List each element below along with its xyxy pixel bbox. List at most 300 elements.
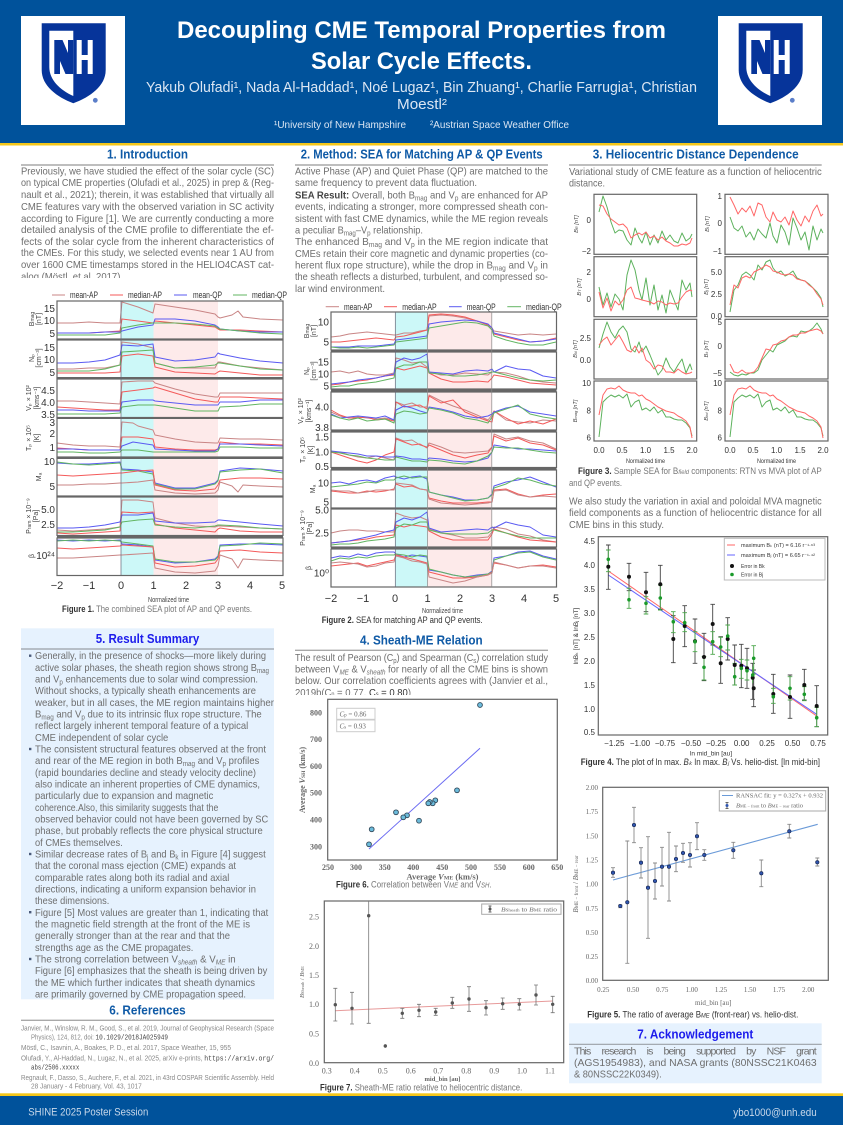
y tick labels: 10	[318, 318, 329, 328]
panel: Vp	[331, 392, 556, 430]
y tick labels: 5	[718, 318, 723, 327]
y axis labels: Bmag [nT]	[573, 399, 579, 422]
y tick labels: 6	[587, 434, 592, 442]
text: result bullets: of CMEs themselves.	[35, 837, 123, 849]
panel: BN	[594, 319, 697, 379]
panel: references	[21, 1002, 274, 1090]
axis ticks	[584, 537, 826, 748]
x tick labels: 5	[279, 580, 285, 592]
axis ticks: 1.0	[309, 1000, 319, 1009]
figure 2: SEA for matching events	[298, 302, 562, 625]
axis ticks: 0.5	[584, 728, 596, 737]
text: introduction: over 1600 CME timestamps stored in the HELIO4CAST cat-	[21, 259, 274, 271]
y axis labels	[573, 215, 711, 422]
panel: Bmag	[331, 312, 556, 350]
logo left	[21, 16, 125, 125]
text: result bullets: observed behavior could not have been governed by SC	[35, 814, 269, 826]
text: method: and V	[382, 236, 411, 248]
y tick labels: 4.5	[41, 386, 55, 397]
legend: Error in Bj	[741, 572, 763, 578]
y axis labels: BT [nT]	[577, 278, 583, 296]
text: method: herent flux rope structure), while the drop in B	[295, 260, 507, 272]
axis ticks: 2.00	[802, 986, 815, 994]
panel: Bj	[725, 257, 828, 317]
text: introduction: Previously, we have studied the effect of the solar cycle (SC)	[21, 166, 274, 178]
text: method: p	[534, 266, 538, 272]
y tick labels: 10	[44, 457, 55, 468]
y axis labels: [cm⁻³]	[36, 348, 43, 368]
x axis label: Normalized time	[422, 606, 463, 615]
text: sheath-ME relation: p	[393, 658, 397, 665]
title: Decoupling CME Temporal Properties from	[177, 17, 666, 44]
text: reference list: abs/2506.xxxxx	[31, 1064, 80, 1072]
figure 4: ln max field vs distance: ln mid_bin [au]	[690, 750, 732, 758]
axis ticks: 250	[322, 863, 334, 872]
y tick labels: 4.0	[315, 402, 329, 414]
y tick labels: −1	[713, 247, 723, 256]
y axis labels: Bmag	[29, 312, 36, 326]
y tick labels: 0	[718, 219, 723, 228]
text: introduction: CME features vary with the observed variation in SC activity	[21, 201, 275, 213]
y axis labels: [Pa]	[33, 510, 40, 522]
x tick labels: 0	[118, 580, 124, 592]
legend: mean-QP	[467, 302, 496, 312]
affiliations: ¹University of New Hampshire	[274, 119, 406, 131]
axis ticks: 0.75	[586, 905, 598, 913]
text: reference list	[21, 1024, 274, 1090]
axis ticks: 1.5	[309, 971, 319, 980]
axis ticks: 1.0	[584, 705, 596, 714]
text: introduction: fects of the solar cycle from the inherent characteristics of	[21, 236, 274, 248]
text: result bullets: the ME which further indicates that sheath dynamics	[35, 977, 255, 989]
text: result bullets: j	[146, 854, 149, 862]
panel: heliocentric distance dependence	[569, 146, 822, 190]
text: introduction: detailed analysis of the CME profile to differentiate the ef-	[21, 224, 274, 236]
panel: Bmag right	[725, 381, 828, 441]
text: acknowledgement: This research is being supported by NSF grant	[574, 1046, 817, 1058]
title: Solar Cycle Effects.	[311, 48, 532, 75]
axis ticks: 1.00	[686, 986, 698, 994]
caption: figure 3: Figure 3. Sample SEA for Bfield components: RTN vs MVA plot of AP	[578, 466, 822, 476]
legend	[724, 538, 825, 580]
axis ticks: 1.75	[586, 808, 598, 816]
figure 7: sheath-ME ratio: mid_bin [au]	[424, 1076, 460, 1083]
axis ticks: 0.50	[586, 929, 598, 937]
axis ticks: 0.8	[461, 1066, 471, 1076]
text: reference list: Physics), 124, 812, doi: 10.1029/2018JA025949	[31, 1032, 168, 1042]
y axis labels: Pram × 10⁻⁹	[26, 498, 33, 534]
panel: Pram	[331, 509, 556, 547]
y tick labels: 3.8	[315, 423, 329, 434]
heading: heliocentric distance: 3. Heliocentric Distance Dependence	[593, 146, 799, 162]
heading: acknowledgement: 7. Acknowledgement	[637, 1026, 754, 1042]
y tick labels: 10⁰	[314, 568, 329, 580]
heading: introduction: 1. Introduction	[107, 146, 188, 162]
y tick labels: 3.5	[41, 410, 55, 421]
axis ticks: 2.0	[309, 942, 319, 951]
y tick labels: 5	[323, 498, 329, 508]
axis ticks: 700	[310, 735, 322, 744]
axis ticks: 3.5	[584, 585, 596, 594]
text: method: relationship.	[371, 224, 423, 236]
y tick labels: 5	[323, 338, 329, 348]
text: method: The enhanced B	[295, 236, 372, 248]
legend	[337, 708, 375, 732]
text: result bullets: and V	[35, 674, 62, 686]
legend: median-AP	[128, 290, 162, 300]
axis ticks: −1.00	[630, 739, 651, 748]
panel: BR	[594, 194, 697, 254]
text: result bullets: these dimensions.	[35, 895, 109, 907]
panel: method	[295, 146, 548, 295]
y tick labels: 5.0	[315, 506, 329, 516]
y tick labels: 0.5	[315, 462, 329, 473]
text: sheath-ME relation: & V	[349, 664, 367, 676]
legend: BSheath to BME ratio	[501, 906, 557, 914]
text: result bullets: particularly due to expansion and magnetic	[35, 790, 213, 802]
text: result bullets: strengths age as the CME propagates.	[35, 942, 193, 954]
axis ticks: 300	[310, 842, 322, 852]
y axis labels: [nT]	[311, 325, 318, 337]
fit line	[369, 748, 480, 849]
y axis labels: [kms⁻¹]	[34, 387, 41, 409]
x tick labels	[325, 593, 559, 605]
axis ticks: 1.25	[586, 856, 598, 864]
axis ticks: 1.50	[586, 832, 598, 840]
text: result bullets: active solar phases, the sheath region shows strong B	[35, 662, 287, 674]
y axis labels: Btot [nT]	[704, 401, 710, 421]
text: acknowledgement: & 80NSSC22K0349).	[574, 1068, 662, 1080]
x tick labels: 0.5	[616, 446, 628, 455]
y axis labels	[26, 312, 43, 558]
text: result bullets: reflect largely inherent temporal feature of a typical	[35, 720, 248, 732]
x axis label: Normalized time	[148, 595, 189, 604]
text: method: and V	[427, 190, 455, 202]
axis ticks: 350	[379, 863, 391, 872]
caption: figure 6: Figure 6. Correlation between VME and VSH.	[336, 880, 492, 890]
text: result bullets: profiles	[226, 755, 259, 767]
x tick labels: 1.0	[771, 446, 783, 455]
axis ticks: 2.0	[584, 657, 596, 666]
figure 5: ME front to rear ratio: mid_bin [au]	[695, 999, 731, 1007]
y axis labels: β	[306, 566, 313, 570]
axis ticks: 0.00	[734, 739, 750, 748]
fit line	[335, 1001, 553, 1011]
axis ticks: 600	[310, 762, 322, 771]
caption: figure 3	[569, 466, 822, 488]
text: method: and V	[506, 260, 534, 272]
legend: RANSAC fit: y = 0.327x + 0.932	[736, 792, 823, 800]
text: reference list: 28 January - 4 February, Vol. 43, 1017	[31, 1081, 142, 1090]
panel: MA	[331, 470, 556, 508]
x tick labels: 2	[457, 593, 463, 605]
y axis labels: Tₚ × 10⁵	[26, 425, 33, 451]
caption: figure 1: Figure 1. The combined SEA plot of AP and QP events.	[62, 604, 252, 614]
axis ticks: −0.50	[681, 739, 702, 748]
error bars	[611, 807, 819, 963]
axis ticks: 2.00	[586, 784, 598, 792]
y tick labels	[314, 318, 329, 580]
y axis labels: Nₚ	[29, 354, 36, 362]
panel: Bmag left	[594, 381, 697, 441]
text: method: mag	[369, 242, 382, 249]
text: sheath-ME relation: ME	[339, 670, 349, 676]
axis ticks: 0.5	[378, 1066, 388, 1076]
text: method: a peculiar B	[295, 224, 350, 236]
y axis labels: Tₚ × 10⁵	[300, 437, 307, 463]
text: reference list: Regnault, F., Dasso, S., Auchere, F., et al. 2021, in 43rd COSPAR Scientific Assembly. Held	[21, 1073, 274, 1082]
text: method: mag	[344, 230, 356, 238]
text: result bullets: mag	[41, 714, 54, 722]
y tick labels: 5.0	[41, 505, 55, 516]
panel: Bk	[725, 319, 828, 379]
y tick labels: 0	[587, 216, 592, 225]
text: result bullets: in	[225, 954, 236, 966]
text: result bullets: Similar decrease rates of B	[35, 848, 161, 860]
axis ticks: 600	[523, 863, 535, 872]
y axis labels: Mₐ	[310, 484, 317, 493]
text: acknowledgement	[574, 1046, 817, 1080]
axis ticks: 4.5	[584, 537, 596, 546]
axis ticks: 0.50	[785, 739, 801, 748]
y axis labels: BN [nT]	[573, 340, 579, 358]
caption: figure 7: Figure 7. Sheath-ME ratio relative to heliocentric distance.	[320, 1082, 522, 1092]
y tick labels: 1	[718, 192, 723, 201]
panel: result summary	[21, 628, 274, 1000]
legend: Cs = 0.93	[340, 722, 366, 730]
text: method: lar wind environment.	[295, 283, 385, 295]
y axis labels	[298, 324, 318, 570]
figure 4: ln max field vs distance	[573, 537, 828, 767]
heading: sheath-ME relation: 4. Sheath-ME Relation	[360, 632, 483, 648]
axis ticks	[586, 784, 815, 994]
figure 7: sheath-ME ratio	[299, 901, 564, 1092]
y tick labels: 15	[318, 358, 329, 368]
text: method: p	[455, 196, 459, 202]
y axis labels: Vₚ × 10²	[26, 384, 33, 411]
text: method: mag	[415, 196, 427, 202]
legend: maximum Bₖ (nT) = 6.16 r⁻¹·⁶³	[741, 543, 815, 549]
axis ticks: 1.50	[744, 986, 757, 994]
text: result bullets: also indicate an inherent properties of CME dynamics,	[35, 778, 260, 790]
y tick labels: 4.0	[41, 398, 55, 409]
caption: figure 4: Figure 4. The plot of ln max. Bₖ ln max. Bⱼ Vs. helio-dist. [ln mid-bin]	[581, 757, 820, 767]
data points: black	[606, 565, 819, 708]
footer: email: ybo1000@unh.edu	[733, 1107, 817, 1119]
x tick labels: 5	[553, 593, 559, 605]
axis ticks: 550	[494, 863, 506, 872]
fit lines	[608, 571, 817, 716]
x tick labels: 0.5	[747, 446, 759, 455]
axis ticks: 1.1	[545, 1066, 555, 1076]
text: method: events, indicating a stronger, more compressed sheath con-	[295, 201, 548, 213]
axis ticks: 0.3	[322, 1066, 332, 1076]
y tick labels: 10	[318, 370, 329, 380]
text: result bullets: ME	[216, 960, 226, 966]
logo right	[718, 16, 822, 125]
text: result bullets: Figure [6] emphasizes that the sheath is being driven by	[35, 965, 268, 977]
axis ticks: 0.50	[627, 986, 640, 994]
title	[177, 17, 666, 75]
legend: median-AP	[402, 302, 437, 312]
footer	[0, 1093, 843, 1125]
legend: mean-AP	[70, 290, 98, 300]
axis ticks: 2.5	[584, 633, 596, 642]
text: reference list: Olufadi, Y., Al-Haddad, N., Lugaz, N., et al. 2025, arXiv e-prints, https://arxiv.org/	[21, 1054, 274, 1064]
axis ticks: 1.25	[715, 986, 728, 994]
affiliations	[274, 119, 569, 131]
y axis labels: β	[29, 554, 36, 558]
x tick labels: 0.0	[724, 446, 736, 455]
text: method: –V	[356, 224, 367, 236]
y tick labels: 10	[44, 316, 55, 327]
text: method	[295, 166, 548, 295]
axis ticks: 800	[310, 708, 322, 718]
authors: Moestl²	[397, 97, 447, 113]
y tick labels: 1.5	[315, 432, 329, 444]
text: result bullets: generally stronger than at the rear and that the	[35, 930, 230, 942]
scatter points	[367, 703, 482, 847]
heading: method: 2. Method: SEA for Matching AP & QP Events	[301, 146, 543, 162]
text: heliocentric intro: Variational study of CME feature as a function of heliocentric	[569, 166, 822, 178]
axis ticks: 400	[407, 863, 419, 872]
text: result bullets: and B	[148, 848, 175, 860]
panel: sheath-ME relation	[290, 632, 550, 700]
y tick labels: 2.5	[315, 528, 329, 540]
y tick labels: 5.0	[711, 268, 723, 277]
axis ticks: 0.0	[309, 1059, 319, 1068]
y tick labels: 2.5	[41, 520, 55, 531]
text: method: in	[538, 260, 548, 272]
x tick labels: 3	[215, 580, 221, 592]
text: heliocentric intro	[569, 166, 822, 190]
y tick labels: 2	[49, 429, 55, 440]
footer: session: SHINE 2025 Poster Session	[28, 1106, 148, 1118]
y axis labels: Vₚ × 10²	[298, 397, 305, 424]
text: method: p	[367, 230, 371, 238]
y axis labels: [Pa]	[307, 522, 314, 534]
text: result bullets: comparable rates along both its radial and axial	[35, 872, 229, 884]
caption: figure 2: Figure 2. SEA for matching AP and QP events.	[322, 615, 483, 625]
panel: Tp	[57, 418, 283, 457]
axis ticks: 0.25	[597, 986, 610, 994]
text: sheath-ME relation: s	[473, 658, 477, 665]
legend	[326, 302, 562, 312]
legend: Error in Bk	[741, 564, 765, 570]
text: introduction: on typical CME properties (Olufadi et al., 2025) in prep & (Reg-	[21, 177, 274, 189]
axis ticks: 300	[350, 863, 362, 872]
legend	[719, 791, 826, 811]
text: result bullets: Generally, in the presence of shocks—more likely during	[35, 650, 266, 662]
axis ticks: 0.00	[586, 977, 598, 985]
y axis labels: Bl [nT]	[705, 216, 711, 232]
panel: introduction	[15, 146, 280, 286]
figure 5: ME front to rear ratio	[572, 784, 828, 1020]
x tick labels	[593, 446, 829, 455]
x tick labels: 1	[424, 593, 431, 605]
panel: beta	[331, 549, 556, 587]
y tick labels: 6	[718, 434, 723, 442]
text: result bullets: are primarily governed by CME propagation speed.	[35, 988, 246, 1000]
y tick labels: 5	[49, 329, 55, 340]
axis ticks: 2.5	[309, 912, 319, 922]
text: result bullets: coherence.Also, this similarity suggests that the	[35, 802, 218, 814]
y tick labels: 5	[49, 482, 55, 493]
x tick labels: 2.0	[686, 446, 698, 455]
text: result bullets: in Figure [4] suggest	[179, 848, 266, 860]
x tick labels: −2	[51, 580, 63, 592]
panel: Np	[331, 352, 556, 389]
text: method: are enhanced for AP	[458, 190, 548, 202]
axis labels: lnBₖ [nT] & lnBⱼ [nT]	[573, 607, 580, 664]
axis ticks: 1.75	[773, 986, 786, 994]
text: result bullets	[34, 650, 274, 1000]
text: sheath-ME relation: ) and Spearman (C	[397, 652, 474, 664]
text: result bullets: p	[81, 714, 85, 722]
x tick labels: 2	[183, 580, 189, 592]
panel: Np	[57, 340, 283, 378]
y axis labels: BR [nT]	[574, 215, 580, 233]
y tick labels: 10	[582, 379, 592, 388]
data points: green	[606, 558, 818, 720]
x tick labels: 1.5	[663, 446, 675, 455]
text: axial and poloidal study: field components as a function of heliocentric distance for all	[569, 507, 822, 519]
text: sheath-ME relation: sheath	[367, 670, 386, 676]
header banner	[0, 0, 843, 146]
text: result bullets: and V	[195, 755, 223, 767]
axis ticks: 0.25	[759, 739, 775, 748]
x tick labels: −2	[325, 593, 337, 605]
bullets	[29, 654, 31, 960]
y tick labels: 2.5	[580, 334, 592, 343]
axis ticks: 450	[436, 863, 448, 872]
text: sheath-ME relation: ) correlation study	[476, 652, 549, 664]
panel: Vp	[57, 379, 283, 418]
x tick labels: 0.0	[593, 446, 605, 455]
legend	[52, 290, 287, 300]
text: axial and poloidal study: CME bins in this study.	[569, 519, 664, 531]
axis ticks: 0.25	[586, 953, 598, 961]
text: sheath-ME relation: 2019b(Cp = 0.77, Cs = 0.80)	[295, 687, 411, 699]
text: sheath-ME relation: between V	[295, 664, 345, 676]
text: result bullets: & V	[197, 954, 216, 966]
axis labels: Average VSH (km/s)	[298, 747, 307, 813]
y tick labels: 15	[44, 304, 55, 315]
text: method: SEA Result: Overall, both B	[295, 190, 422, 202]
text: result bullets: the magnetic field strength at the front of the ME is	[35, 918, 250, 930]
text: method: same frequency to prevent data fluctuation.	[295, 177, 477, 189]
text: result bullets: due to its intrinsic flux rope structure. The	[85, 708, 262, 720]
panel: acknowledgement	[569, 1023, 822, 1083]
y tick labels: 0.0	[711, 312, 723, 321]
y tick labels: 8	[587, 406, 592, 416]
y tick labels: 5	[323, 382, 329, 392]
text: method: sistent with fast CME dynamics, while the ME region reveals	[295, 213, 548, 225]
y axis labels: [kms⁻¹]	[306, 400, 313, 422]
y tick labels: 1	[49, 443, 55, 454]
x tick labels: −1	[83, 580, 95, 592]
text: result bullets: Without shocks, a typically sheath enhancements are	[35, 685, 256, 697]
heading: result summary: 5. Result Summary	[96, 631, 200, 646]
text: introduction: nault et al., 2021); therein, it was established that virtually all	[21, 189, 274, 201]
x tick labels: 1.5	[794, 446, 806, 455]
y tick labels: 0	[718, 342, 723, 351]
x tick labels: −1	[357, 593, 369, 605]
panel: Tp	[331, 432, 556, 468]
panel: Bmag	[57, 301, 283, 339]
data points	[334, 914, 554, 1048]
axis ticks: 1.0	[517, 1066, 527, 1076]
